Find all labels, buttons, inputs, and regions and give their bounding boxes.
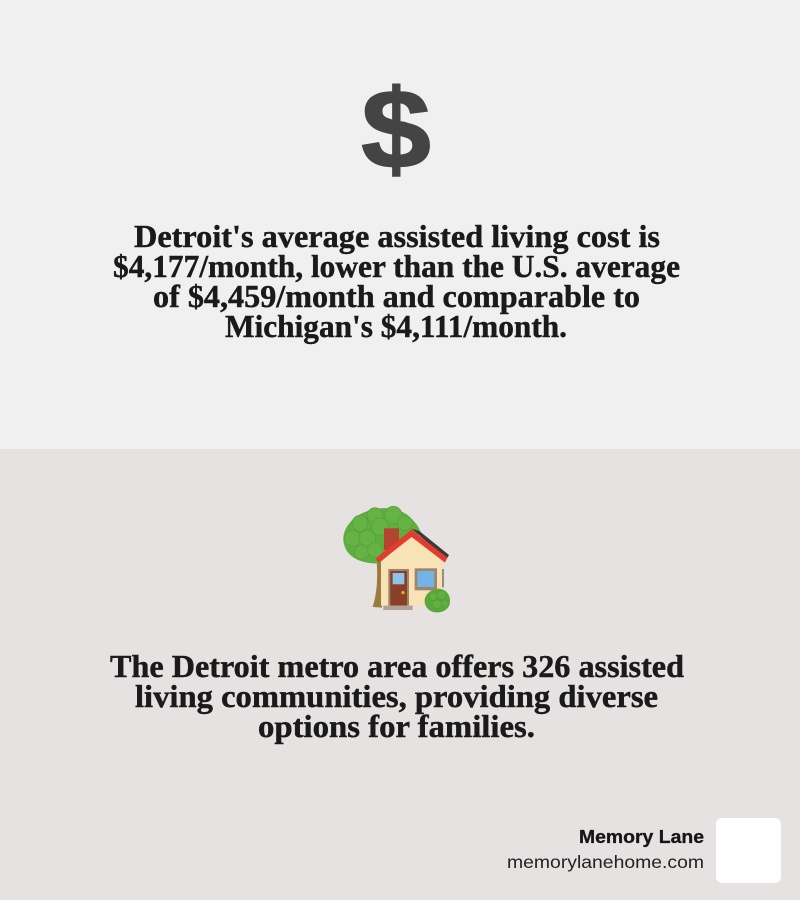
logo placeholder <box>716 818 781 883</box>
text block: communities: The Detroit metro area offers 326 assisted <box>110 648 684 684</box>
footer: brand <box>507 818 781 883</box>
icon: dollar sign: $ <box>361 67 431 192</box>
icon: house with tree <box>343 506 450 612</box>
text block: cost comparison: Michigan's $4,111/month. <box>225 308 567 344</box>
text block: cost comparison: Detroit's average assisted living cost is <box>134 218 660 254</box>
text block: cost comparison <box>113 218 680 344</box>
panel: assisted living cost <box>0 0 800 449</box>
text block: communities: options for families. <box>258 708 535 744</box>
text block: cost comparison: of $4,459/month and comparable to <box>153 278 640 314</box>
text block: communities: living communities, providing diverse <box>135 678 658 714</box>
brand website: memorylanehome.com <box>507 852 704 872</box>
text block: cost comparison: $4,177/month, lower than the U.S. average <box>113 248 680 284</box>
panel: assisted living communities <box>0 449 800 900</box>
text block: communities <box>110 648 684 744</box>
brand name: Memory Lane <box>579 827 704 847</box>
